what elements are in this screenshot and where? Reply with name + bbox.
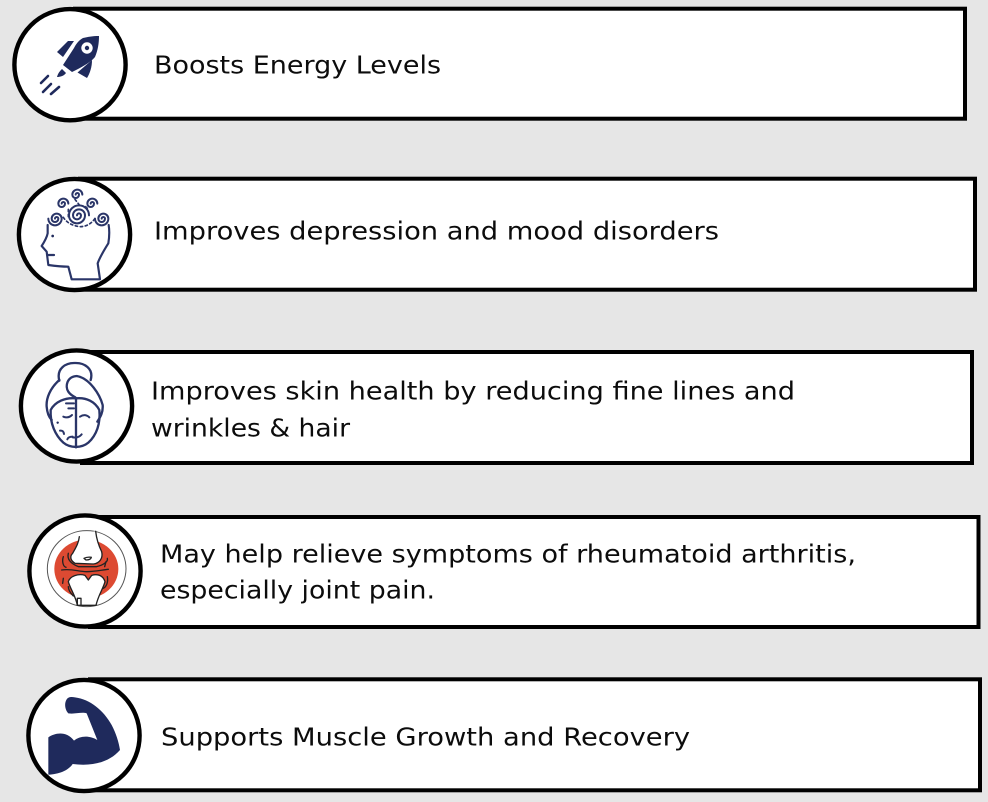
icon: flexed arm	[48, 697, 120, 775]
panel: muscle	[28, 679, 980, 791]
panel box 5	[90, 679, 980, 790]
icon: head with spirals	[42, 190, 109, 279]
panel: skin	[21, 350, 972, 463]
text: may help relieve: May help relieve symptoms of rheumatoid arthritis,	[160, 540, 856, 568]
icon circle 4	[29, 515, 141, 627]
icon: inflamed joint	[47, 531, 126, 607]
text: improves skin health: Improves skin health by reducing fine lines and	[151, 376, 795, 406]
icon: rocket	[41, 36, 99, 94]
text: boosts energy levels: Boosts Energy Levels	[154, 50, 441, 80]
icon circle 1	[14, 9, 126, 120]
text: wrinkles and hair: wrinkles & hair	[151, 414, 351, 442]
panel: boosts energy	[14, 9, 965, 120]
panel: mood	[19, 179, 975, 290]
panel: arthritis	[29, 515, 978, 627]
text: supports muscle growth: Supports Muscle Growth and Recovery	[161, 722, 690, 752]
icon circle 5	[28, 680, 140, 791]
panel box 2	[80, 179, 975, 290]
panel box 4	[90, 517, 978, 627]
icon circle 3	[21, 350, 132, 462]
text: especially joint pain: especially joint pain.	[160, 576, 435, 604]
text: improves depression: Improves depression and mood disorders	[154, 216, 719, 246]
panel box 1	[75, 9, 965, 119]
icon circle 2	[19, 179, 130, 290]
panel box 3	[82, 352, 972, 463]
icon: face with hair bun	[47, 363, 103, 447]
